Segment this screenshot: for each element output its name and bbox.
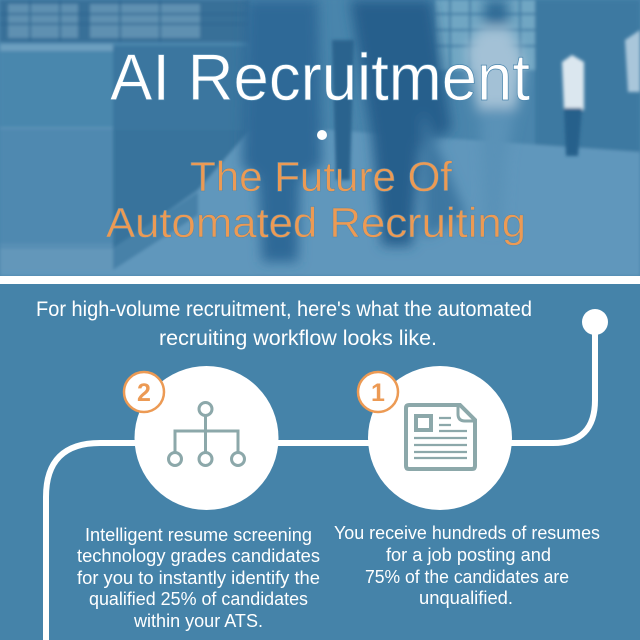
title: AI Recruitment: [110, 40, 530, 114]
step 1 number badge: [358, 372, 398, 412]
step 2 description: technology grades candidates: [77, 546, 320, 566]
step 1 description: You receive hundreds of resumes: [334, 523, 600, 543]
subtitle: The Future Of: [190, 153, 452, 200]
step 2 description: within your ATS.: [133, 611, 263, 631]
subtitle: Automated Recruiting: [106, 199, 526, 246]
connector start dot: [582, 309, 608, 335]
step 2 number badge: [124, 372, 164, 412]
header photo: blurred commuters in blue duotone: [0, 0, 640, 276]
step 1 description: [334, 523, 600, 608]
step 1 circle: [368, 366, 512, 510]
step 1 description: 75% of the candidates are: [365, 567, 569, 587]
intro text: For high-volume recruitment, here's what the automated: [36, 298, 532, 321]
step 1 description: unqualified.: [419, 588, 513, 608]
header dot: [317, 130, 327, 140]
intro text: recruiting workflow looks like.: [159, 327, 437, 350]
subtitle: [106, 153, 526, 246]
step 2 description: qualified 25% of candidates: [89, 589, 308, 609]
workflow connector line: [46, 322, 595, 640]
intro text: [36, 298, 532, 350]
step 1 description: for a job posting and: [386, 545, 551, 565]
white divider band: [0, 276, 640, 284]
step 2 circle: [134, 366, 278, 510]
step 2 description: for you to instantly identify the: [77, 568, 320, 588]
step 1 number badge: 1: [371, 379, 385, 407]
icon: resume document: [406, 405, 475, 469]
body panel background: [0, 284, 640, 640]
icon: hierarchy tree: [168, 402, 244, 466]
step 2 description: Intelligent resume screening: [85, 525, 312, 545]
step 2 description: [77, 525, 320, 631]
step 2 number badge: 2: [137, 379, 151, 407]
